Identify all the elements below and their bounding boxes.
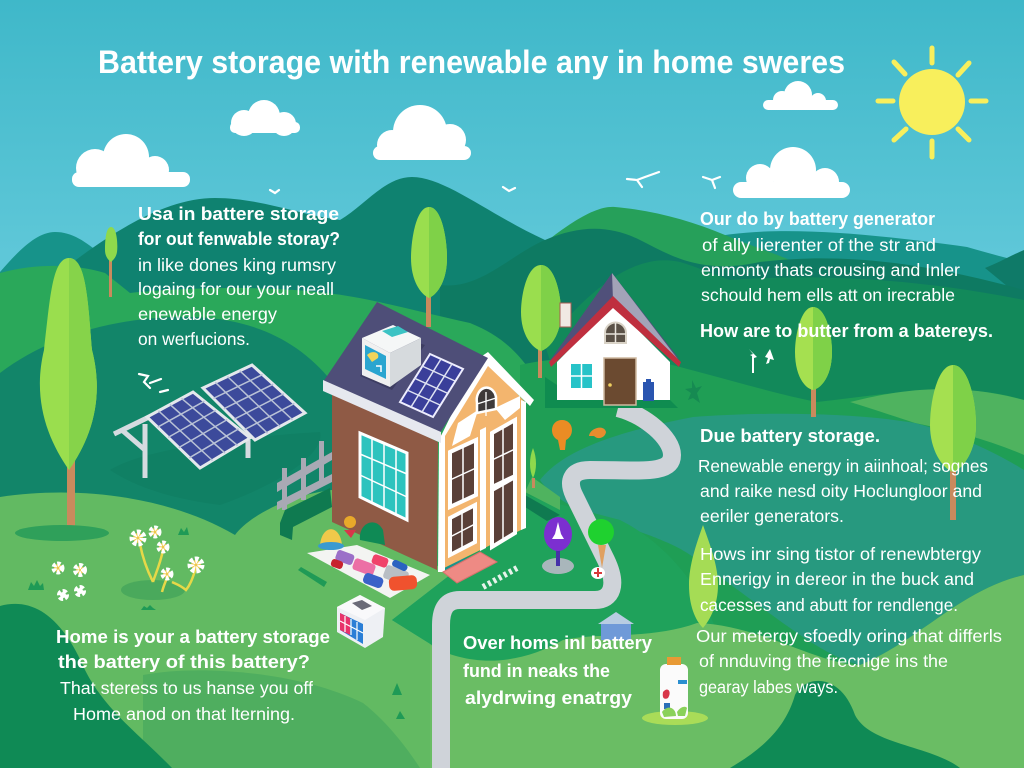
small decorations near house [530,420,606,488]
text block: bottom right: of nnduving the frecnige ins the [699,651,948,671]
text block: bottom centre: fund in neaks the [463,660,610,681]
text block: middle right: Due battery storage. [700,425,880,446]
trees [15,207,976,628]
text block: top left: enewable energy [138,304,277,324]
entry steps [443,552,497,583]
text block: top right: enmonty thats crousing and Inler [701,260,960,280]
text block: top left: on werfucions. [138,329,250,349]
roof battery unit [360,325,425,390]
text block: bottom left [56,626,330,724]
clouds [72,81,850,198]
small white house [545,273,681,408]
crosswalk marks [483,568,517,587]
sun [878,48,986,157]
ground-mounted solar panels [110,365,320,505]
rooftop solar panel [400,354,463,417]
text block: bottom centre [463,632,653,708]
plant silhouette [685,380,702,403]
background mountains [0,177,1024,768]
birds [270,172,720,193]
text block: top right: schould hem ells att on irecrable [701,285,955,305]
text block: middle right: and raike nesd oity Hoclungloor and [700,481,982,501]
big side window [360,433,407,520]
small silhouettes [749,349,774,373]
text block: top right: Our do by battery generator [700,208,935,229]
hedge left of house [280,488,332,540]
text block: top left: for out fenwable storay? [138,228,340,249]
text block: bottom right: gearay labes ways. [699,677,838,697]
text block: middle right: eeriler generators. [700,506,844,526]
text block: middle right [698,425,988,615]
text block: top left: in like dones king rumsry [138,255,336,275]
purple location pin [542,517,574,574]
gazebo [598,612,634,640]
text block: top left [138,203,340,349]
title: Battery storage with renewable any in home sweres [98,44,845,80]
picnic quilt with toys [298,516,430,598]
green ball tree with marker [588,519,614,579]
fence [277,441,332,510]
text block: middle right: cacesses and abutt for rendlenge. [700,595,958,615]
text block: bottom left: That steress to us hanse you off [60,678,313,698]
garden path [441,408,672,768]
small home battery box [337,595,385,648]
text block: top right: How are to butter from a batereys. [700,320,993,341]
text block: bottom left: the battery of this battery? [58,651,310,672]
text block: bottom right: Our metergy sfoedly oring that differls [696,626,1002,646]
text block: middle right: Hows inr sing tistor of renewbtergy [700,544,981,564]
birds near solar panels [139,374,168,392]
text block: bottom left: Home anod on that lterning. [73,704,295,724]
text block: top left: logaing for our your neall [138,279,334,299]
main house [323,302,534,572]
text block: bottom centre: alydrwing enatrgy [465,687,633,708]
text block: bottom left: Home is your a battery storage [56,626,330,647]
text block: bottom centre: Over homs inl battery [463,632,653,653]
foreground hills [0,477,1024,768]
text block: middle right: Ennerigy in dereor in the buck and [700,569,974,589]
flowers [28,527,405,719]
recycling bottle [642,657,708,725]
text block: top left: Usa in battere storage [138,203,339,224]
text block: bottom right [696,626,1002,697]
text block: top right [700,208,993,341]
text block: top right: of ally lierenter of the str and [702,235,936,255]
text block: middle right: Renewable energy in aiinhoal; sognes [698,456,988,476]
